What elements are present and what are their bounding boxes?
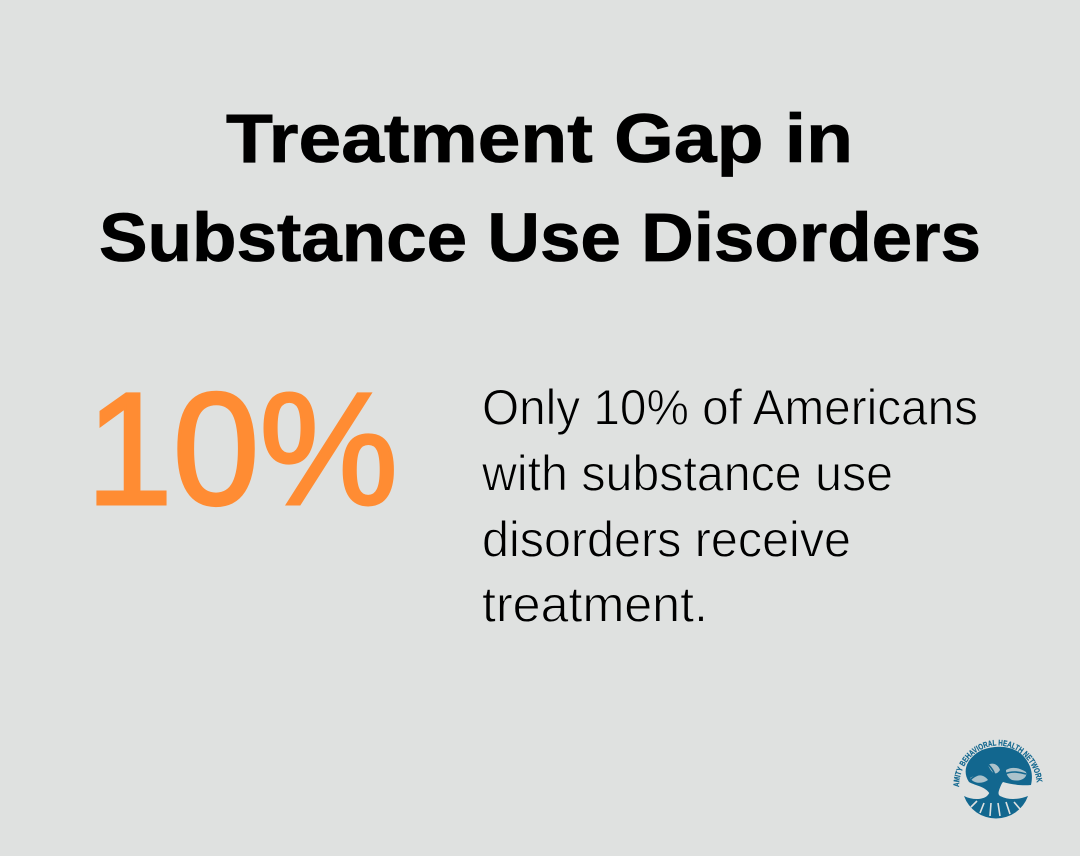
logo tree canopy: [966, 747, 1032, 794]
description text: disorders receive: [482, 512, 851, 568]
title: Treatment Gap in: [226, 100, 853, 177]
description text: Only 10% of Americans: [482, 380, 978, 436]
logo root highlights: [971, 801, 1020, 816]
description text: with substance use: [481, 446, 893, 502]
description text: treatment.: [482, 576, 708, 632]
logo canopy light patches: [970, 764, 1026, 783]
title: [99, 100, 981, 276]
big statistic: 10%: 10%: [86, 359, 398, 538]
title: Substance Use Disorders: [99, 199, 981, 276]
logo trunk and roots: [964, 783, 1028, 819]
logo tree branches: [970, 762, 1026, 785]
logo: Amity Behavioral Health Network: [953, 740, 1043, 818]
logo curved name: AMITY BEHAVIORAL HEALTH NETWORK: [953, 740, 1043, 787]
description text: [481, 380, 978, 632]
